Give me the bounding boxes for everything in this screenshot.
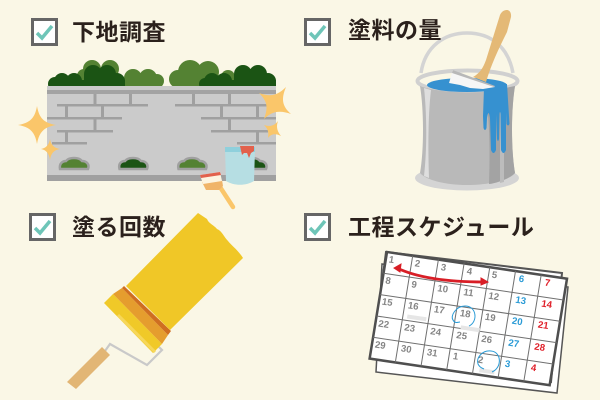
red dates <box>530 278 557 375</box>
grey dates: 15 <box>381 297 394 309</box>
icon: small paint can <box>225 146 255 185</box>
red arrow <box>394 264 488 285</box>
grey dates: 11 <box>462 287 475 300</box>
bucket body <box>420 86 515 185</box>
icon: bucket handle <box>421 33 513 73</box>
roller paint <box>126 213 243 330</box>
blue dates: 3 <box>504 359 511 370</box>
roller handle <box>67 347 110 389</box>
blue dates: 6 <box>518 274 525 285</box>
grey dates: 25 <box>455 330 468 343</box>
bushes <box>48 60 276 91</box>
grey dates: 17 <box>433 304 445 317</box>
grey dates: 4 <box>466 266 474 278</box>
checkbox: schedule <box>306 214 330 240</box>
blue dates: 20 <box>511 316 523 328</box>
grey dates: 12 <box>487 291 500 303</box>
grey dates: 10 <box>436 283 449 296</box>
wall vents <box>60 158 267 169</box>
checkbox: ground survey <box>32 20 56 44</box>
highlights <box>400 314 502 374</box>
back sheet <box>376 264 568 393</box>
bucket rim back <box>418 70 518 92</box>
grey dates: 5 <box>491 270 499 282</box>
roller dark band <box>122 286 171 335</box>
red dates: 14 <box>540 299 553 311</box>
wall body <box>47 86 276 181</box>
grey dates: 16 <box>407 300 419 313</box>
red dates: 7 <box>544 278 551 289</box>
grey dates: 26 <box>480 334 493 346</box>
icon: sparkles <box>18 87 291 160</box>
grey dates: 1 <box>388 255 396 266</box>
panel: wall inspection illustration <box>18 60 291 207</box>
red dates: 28 <box>533 342 546 354</box>
panel: paint roller illustration <box>67 213 243 389</box>
grey dates: 31 <box>426 347 439 360</box>
bucket bottom rim <box>415 166 519 190</box>
title: ground survey: 下地調査 <box>72 19 166 45</box>
grey dates: 22 <box>377 319 390 331</box>
grey dates: 9 <box>410 279 418 291</box>
roller nap <box>104 294 162 353</box>
icon: small brush <box>200 172 233 207</box>
grey dates: 2 <box>414 258 421 270</box>
roller orange band <box>113 288 168 344</box>
grey dates <box>374 255 503 367</box>
grey dates: 23 <box>403 322 416 335</box>
checkbox: coat count <box>30 214 54 240</box>
blue dates: 27 <box>507 338 520 350</box>
grey dates: 8 <box>384 276 392 287</box>
grey dates: 18 <box>459 308 472 321</box>
grey dates: 30 <box>400 343 412 356</box>
red dates: 21 <box>537 320 550 332</box>
calendar grid <box>370 252 567 385</box>
blue circle: 18 <box>452 306 475 326</box>
blue circle: 2 <box>478 351 499 372</box>
title: coat count: 塗る回数 <box>72 214 166 240</box>
grey dates: 29 <box>374 340 386 352</box>
icon: brush in bucket <box>449 10 511 89</box>
paint surface <box>427 78 507 92</box>
roller light stripe <box>118 315 155 352</box>
grey dates: 2 <box>477 355 484 366</box>
blue dates: 13 <box>514 295 527 307</box>
panel: paint bucket illustration <box>415 10 519 190</box>
title: paint amount: 塗料の量 <box>348 17 442 43</box>
grey dates: 1 <box>452 351 460 363</box>
checkbox: paint amount <box>306 20 330 44</box>
grey dates: 19 <box>484 312 496 324</box>
paint drips <box>483 84 510 153</box>
title: schedule: 工程スケジュール <box>348 214 534 240</box>
grey dates: 3 <box>440 262 447 274</box>
second sheet <box>372 252 562 382</box>
roller wire frame <box>105 344 162 365</box>
grey dates: 24 <box>429 326 442 339</box>
red dates: 4 <box>530 363 538 374</box>
panel: schedule calendar illustration <box>370 252 568 393</box>
blue dates <box>504 274 530 371</box>
